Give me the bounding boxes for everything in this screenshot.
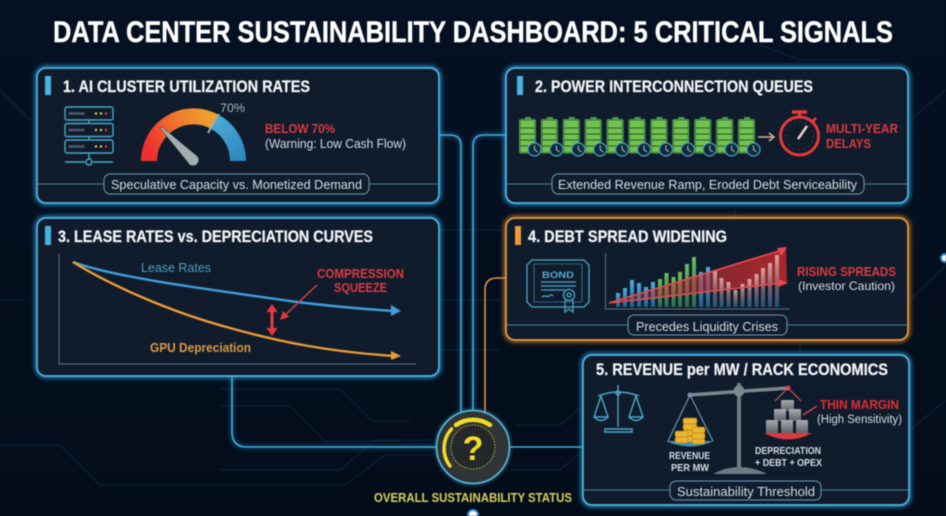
bar chart with rising spreads: [606, 247, 790, 309]
callout: below 70%: (Warning: Low Cash Flow): [265, 137, 406, 151]
icon: bond certificate: BOND: [542, 270, 575, 280]
label pill: panel 5: Sustainability Threshold: [677, 484, 815, 499]
icon: grey cost blocks: [766, 400, 808, 433]
panel 5: revenue per MW: [583, 355, 909, 505]
line chart: GPU Depreciation: [150, 340, 251, 355]
gauge: 70%: [220, 101, 245, 115]
icon: gold coins: [675, 418, 705, 444]
label pill: panel 5: [584, 481, 908, 500]
label pill: panel 1: [38, 174, 438, 194]
callout: compression squeeze: COMPRESSION: [317, 267, 404, 281]
icon: battery row with clocks: [520, 117, 760, 156]
heading: panel 3: 3. LEASE RATES vs. DEPRECIATION CURVES: [58, 227, 373, 246]
line chart: [59, 254, 416, 364]
callout: thin margin: (High Sensitivity): [817, 414, 902, 426]
callout: below 70%: BELOW 70%: [265, 121, 335, 136]
heading: panel 2: 2. POWER INTERCONNECTION QUEUES: [535, 77, 813, 96]
label: depreciation debt opex: [755, 445, 822, 469]
label: revenue per MW: PER MW: [671, 462, 709, 474]
panel 4: debt spread widening: [506, 218, 908, 340]
label: depreciation debt opex: + DEBT + OPEX: [755, 457, 822, 469]
label: revenue per MW: [669, 450, 710, 474]
heading: panel 5: 5. REVENUE per MW / RACK ECONOMICS: [596, 360, 888, 379]
panel 2: power interconnection queues: [506, 68, 908, 203]
callout: multi-year delays: DELAYS: [826, 136, 871, 151]
panel 1: AI cluster utilization: [37, 68, 439, 203]
label pill: panel 4: [507, 315, 907, 335]
connector lines: [232, 135, 583, 447]
callout: multi-year delays: MULTI-YEAR: [826, 121, 899, 136]
indicator dots: [468, 254, 946, 516]
label pill: panel 2: [507, 174, 907, 194]
label: depreciation debt opex: DEPRECIATION: [755, 445, 821, 457]
callout: multi-year delays: [826, 121, 899, 151]
callout: compression squeeze: SQUEEZE: [334, 281, 387, 295]
panel 3: lease rates vs depreciation: [37, 218, 439, 376]
line chart: Lease Rates: [141, 260, 211, 275]
icon: stopwatch: [780, 112, 818, 155]
icon: bond certificate: [527, 260, 589, 312]
callout: rising spreads: (Investor Caution): [798, 279, 895, 293]
heading: panel 4: 4. DEBT SPREAD WIDENING: [528, 227, 727, 246]
gauge: [149, 101, 245, 166]
heading: panel 1: 1. AI CLUSTER UTILIZATION RATES: [63, 77, 310, 96]
illustration: balance scale: [666, 383, 817, 474]
status gauge: overall sustainability: ?: [463, 430, 483, 468]
callout: below 70%: [265, 121, 406, 151]
label: revenue per MW: REVENUE: [669, 450, 710, 462]
label pill: panel 1: Speculative Capacity vs. Monetized Demand: [111, 177, 362, 192]
icon: small scales: [594, 385, 643, 432]
callout: rising spreads: [797, 264, 896, 293]
callout: thin margin: THIN MARGIN: [820, 397, 899, 412]
status gauge: overall sustainability: [433, 407, 513, 487]
label pill: panel 2: Extended Revenue Ramp, Eroded Debt Serviceability: [558, 177, 857, 192]
label pill: panel 4: Precedes Liquidity Crises: [636, 319, 778, 334]
callout: compression squeeze: [317, 267, 404, 295]
icon: server rack: [65, 107, 113, 165]
callout: rising spreads: RISING SPREADS: [797, 264, 896, 279]
arrow: queue to delay: [758, 133, 774, 141]
callout: thin margin: [817, 397, 902, 426]
status label: OVERALL SUSTAINABILITY STATUS: [374, 491, 572, 505]
